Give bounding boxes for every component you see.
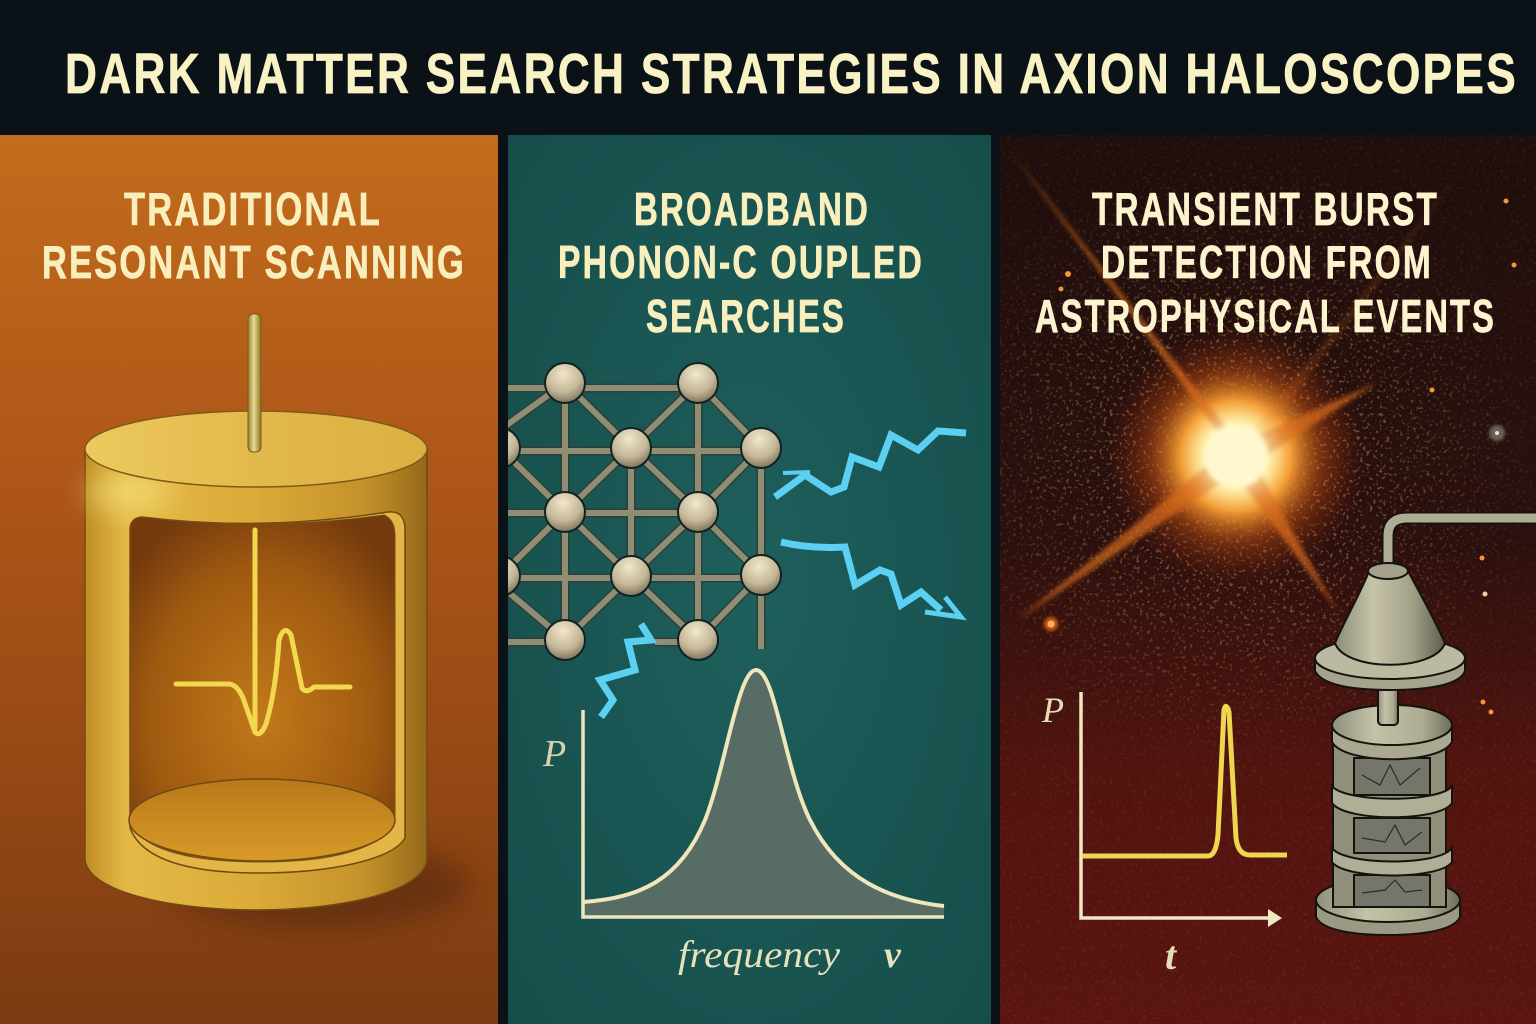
stem	[1378, 686, 1398, 725]
icon: crystal lattice	[480, 363, 781, 660]
heading: traditional resonant scanning: RESONANT SCANNING	[42, 236, 466, 288]
heading: broadband phonon-coupled searches	[558, 183, 924, 342]
astrophysical burst	[1000, 135, 1536, 1024]
stacked body	[1332, 745, 1452, 907]
heading: broadband phonon-coupled searches: PHONON-C OUPLED	[558, 236, 924, 288]
chart: power versus time pulse	[1041, 690, 1287, 978]
icon: resonant cavity cylinder	[85, 314, 470, 930]
panel: traditional resonant scanning	[0, 135, 498, 1024]
heading: broadband phonon-coupled searches: SEARCHES	[646, 290, 846, 342]
heading: traditional resonant scanning	[42, 183, 466, 288]
axis label: t: t	[1165, 933, 1178, 978]
arrow: lower-left phonon bolt	[600, 624, 651, 717]
upper disc	[1332, 705, 1452, 759]
arrow: upper phonon bolt	[775, 431, 966, 497]
axis label: P: P	[542, 733, 566, 775]
pipe	[1388, 518, 1536, 566]
panel dividers	[498, 135, 1000, 1024]
axis label: P: P	[1041, 690, 1064, 730]
flange	[1315, 637, 1465, 690]
panel: broadband phonon-coupled searches	[480, 135, 991, 1024]
heading: traditional resonant scanning: TRADITIONAL	[124, 183, 382, 235]
field stars	[1044, 198, 1516, 714]
axis label: frequency: frequency	[678, 934, 840, 976]
arrow: lower phonon bolt	[781, 542, 961, 617]
cone	[1335, 571, 1445, 665]
axis label: nu: ν	[884, 934, 902, 976]
heading: transient burst detection	[1035, 183, 1496, 342]
icon: detector apparatus	[1315, 518, 1536, 935]
panel: transient burst detection	[1000, 135, 1536, 1024]
base disc	[1316, 878, 1460, 935]
heading: broadband phonon-coupled searches: BROADBAND	[634, 183, 870, 235]
cavity floor	[129, 779, 395, 861]
tuning rod	[248, 314, 261, 452]
chart: power versus frequency peak	[542, 670, 944, 976]
signal trace	[176, 530, 350, 734]
